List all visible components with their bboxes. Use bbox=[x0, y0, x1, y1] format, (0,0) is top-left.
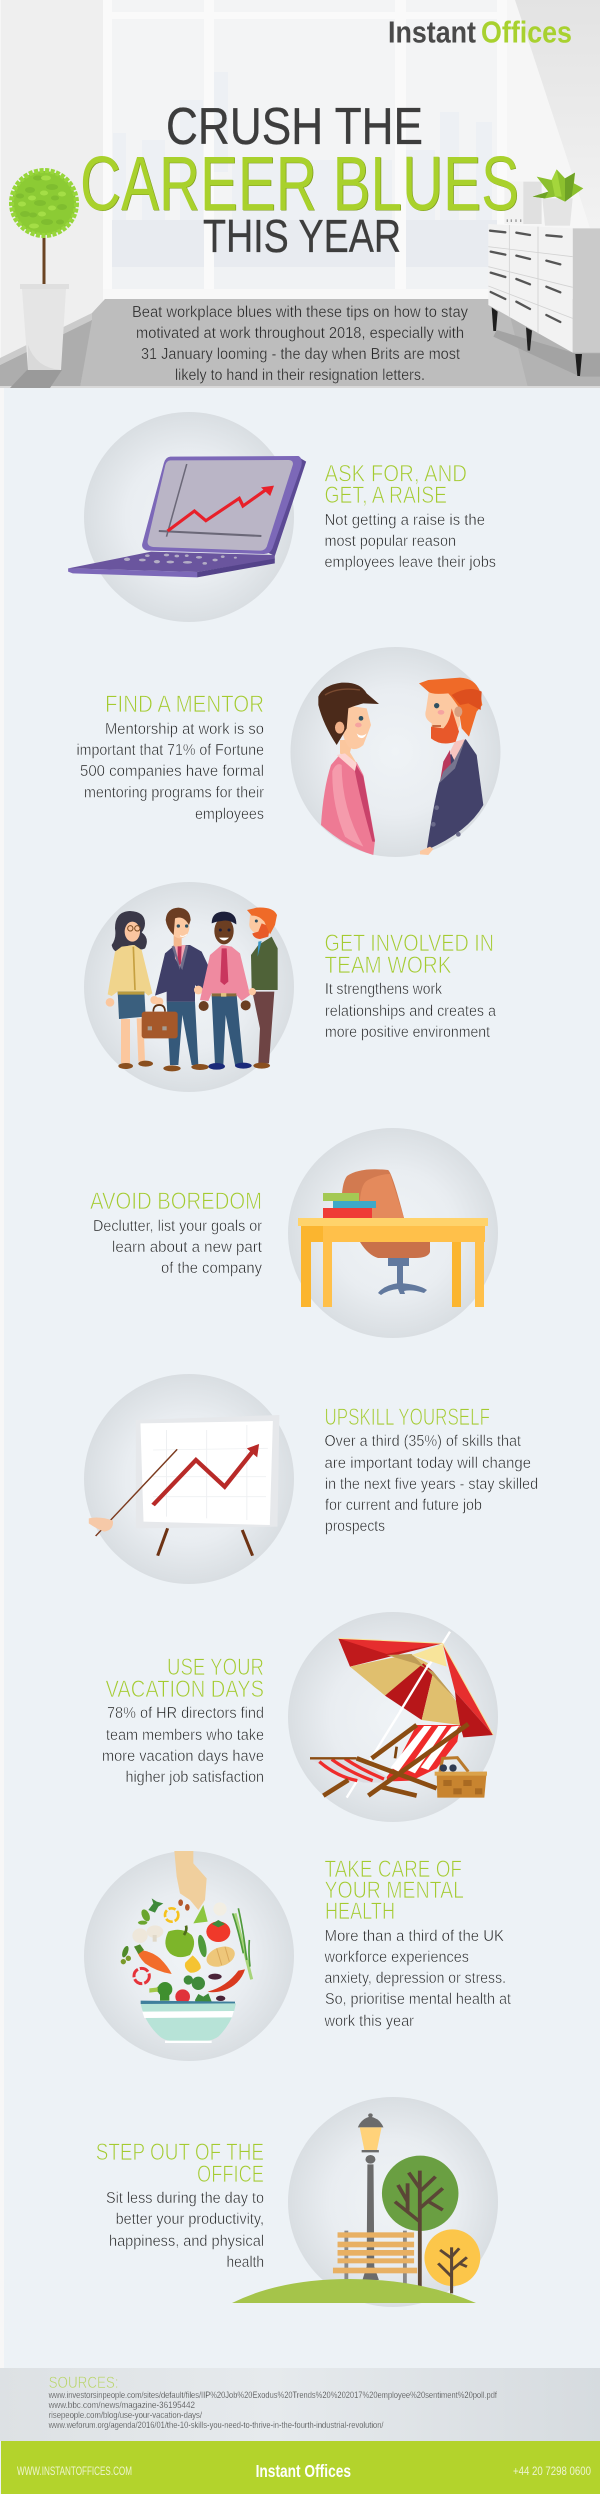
panel: get involved in team work bbox=[84, 882, 496, 1092]
body text: are important today will change bbox=[324, 1455, 531, 1472]
body text: in the next five years - stay skilled bbox=[325, 1476, 538, 1493]
panel: step out of the office bbox=[96, 2097, 498, 2307]
body text bbox=[324, 512, 496, 571]
body text: employees bbox=[195, 806, 264, 823]
body text: Not getting a raise is the bbox=[324, 512, 485, 529]
icon: park with lamp, bench and trees bbox=[232, 2113, 480, 2303]
books bbox=[323, 1193, 376, 1218]
body text: more vacation days have bbox=[102, 1748, 264, 1765]
body text: learn about a new part bbox=[112, 1239, 263, 1256]
icon: potted topiary tree bbox=[10, 170, 76, 388]
panel: take care of your mental health bbox=[84, 1851, 512, 2061]
body text: higher job satisfaction bbox=[126, 1769, 264, 1786]
umbrella bbox=[338, 1638, 493, 1737]
left man bbox=[318, 683, 379, 855]
title bbox=[80, 98, 520, 262]
body text bbox=[324, 1433, 538, 1535]
icon: presentation board with rising arrow bbox=[89, 1415, 279, 1556]
body text: work this year bbox=[324, 2013, 414, 2030]
circle backdrop bbox=[84, 412, 294, 622]
man in pink shirt bbox=[199, 912, 252, 1070]
sources band bbox=[0, 2368, 600, 2441]
potted plant on cabinet bbox=[533, 169, 583, 226]
sources list: www.investorsinpeople.com/sites/default/files/IIP%20Job%20Exodus%20Trends%20%202017%20employee%20sentiment%20poll.pdf bbox=[48, 2390, 497, 2401]
body text bbox=[102, 1705, 264, 1786]
big green tree bbox=[382, 2156, 458, 2288]
bench bbox=[333, 2231, 417, 2293]
heading: YOUR MENTAL bbox=[324, 1877, 464, 1904]
circle backdrop bbox=[290, 647, 500, 857]
body text: Sit less during the day to bbox=[106, 2190, 264, 2207]
panel: ask for a raise bbox=[68, 412, 496, 622]
body text: So, prioritise mental health at bbox=[325, 1991, 512, 2008]
heading: VACATION DAYS bbox=[106, 1676, 264, 1703]
body text: happiness, and physical bbox=[109, 2233, 264, 2250]
footer bar bbox=[1, 2441, 600, 2494]
grass hill bbox=[232, 2279, 476, 2303]
icon: laptop with rising chart bbox=[68, 456, 306, 577]
sources heading: SOURCES: bbox=[49, 2373, 119, 2392]
icon: team of four colleagues bbox=[106, 908, 278, 1071]
body text bbox=[106, 2190, 264, 2271]
deck chair bbox=[310, 1724, 468, 1796]
circle backdrop bbox=[288, 2097, 498, 2307]
body text: 78% of HR directors find bbox=[107, 1705, 264, 1722]
heading bbox=[324, 1856, 464, 1925]
body text: for current and future job bbox=[325, 1497, 482, 1514]
hero room background bbox=[0, 0, 600, 388]
footer logo: Instant Offices bbox=[256, 2461, 351, 2481]
title: THIS YEAR bbox=[203, 210, 401, 262]
heading: USE YOUR bbox=[167, 1654, 264, 1681]
sources list: risepeople.com/blog/use-your-vacation-days/ bbox=[49, 2410, 202, 2421]
heading: AVOID BOREDOM bbox=[90, 1188, 262, 1215]
small yellow tree bbox=[424, 2229, 480, 2293]
panel: upskill yourself bbox=[84, 1374, 538, 1584]
heading: TEAM WORK bbox=[324, 952, 452, 979]
heading bbox=[324, 930, 494, 979]
heading bbox=[96, 2139, 264, 2188]
heading: TAKE CARE OF bbox=[324, 1856, 462, 1883]
body text: Declutter, list your goals or bbox=[93, 1218, 262, 1235]
icon: mentor and mentee talking bbox=[318, 678, 483, 855]
body text: most popular reason bbox=[324, 533, 456, 550]
body text bbox=[325, 981, 496, 1041]
body text: Mentorship at work is so bbox=[105, 721, 264, 738]
sources list bbox=[48, 2390, 497, 2431]
right man bbox=[419, 678, 483, 855]
heading: FIND A MENTOR bbox=[105, 691, 264, 718]
body text: better your productivity, bbox=[116, 2211, 264, 2228]
office chair bbox=[342, 1169, 430, 1295]
man in green jacket bbox=[247, 908, 278, 1069]
heading bbox=[106, 1654, 264, 1703]
heading: STEP OUT OF THE bbox=[96, 2139, 264, 2166]
intro text: likely to hand in their resignation letters. bbox=[175, 367, 425, 384]
intro text: Beat workplace blues with these tips on how to stay bbox=[132, 304, 468, 321]
panel: use your vacation days bbox=[102, 1612, 498, 1822]
panel: avoid boredom bbox=[90, 1128, 498, 1338]
circle backdrop bbox=[288, 1128, 498, 1338]
sources list: www.weforum.org/agenda/2016/01/the-10-skills-you-need-to-thrive-in-the-fourth-industrial-revolution/ bbox=[48, 2420, 384, 2431]
desk bbox=[298, 1218, 488, 1307]
body text bbox=[93, 1218, 263, 1277]
icon: desk with chair and books bbox=[298, 1169, 488, 1307]
body text: anxiety, depression or stress. bbox=[324, 1970, 506, 1987]
body text: employees leave their jobs bbox=[324, 554, 496, 571]
body text: team members who take bbox=[106, 1727, 264, 1744]
body text: important that 71% of Fortune bbox=[76, 742, 264, 759]
panel: hero office scene bbox=[0, 0, 600, 388]
heading: ASK FOR, AND bbox=[324, 460, 467, 488]
body text: prospects bbox=[325, 1518, 385, 1535]
heading bbox=[324, 460, 467, 509]
body text bbox=[76, 721, 264, 823]
sources list: www.bbc.com/news/magazine-36195442 bbox=[48, 2400, 195, 2411]
logo: Instant Offices bbox=[388, 14, 572, 50]
body text bbox=[324, 1928, 512, 2030]
circle backdrop bbox=[288, 1612, 498, 1822]
body text: mentoring programs for their bbox=[84, 784, 264, 802]
circle backdrop bbox=[84, 1851, 294, 2061]
icon: filing cabinet with plant bbox=[488, 169, 600, 377]
heading: UPSKILL YOURSELF bbox=[324, 1404, 490, 1431]
circle backdrop bbox=[84, 1374, 294, 1584]
logo: Instant Offices: Offices bbox=[481, 14, 572, 50]
logo: Instant Offices: Instant bbox=[388, 14, 476, 50]
body text: More than a third of the UK bbox=[324, 1928, 505, 1945]
man in navy suit bbox=[155, 908, 210, 1071]
body text: Over a third (35%) of skills that bbox=[324, 1433, 522, 1450]
body text: It strengthens work bbox=[325, 981, 442, 998]
folders on cabinet bbox=[504, 182, 542, 224]
briefcase bbox=[142, 1005, 178, 1038]
heading: HEALTH bbox=[325, 1898, 395, 1925]
heading: GET INVOLVED IN bbox=[324, 930, 494, 957]
picnic basket bbox=[435, 1758, 487, 1798]
street lamp bbox=[358, 2113, 383, 2280]
icon: beach umbrella, deck chair and basket bbox=[310, 1632, 493, 1798]
body text: 500 companies have formal bbox=[80, 763, 264, 780]
intro text bbox=[132, 304, 468, 384]
icon: hand dropping vegetables into bowl bbox=[121, 1851, 252, 2043]
intro text: motivated at work throughout 2018, especially with bbox=[136, 325, 464, 342]
body text: workforce experiences bbox=[324, 1949, 469, 1966]
heading: GET, A RAISE bbox=[324, 482, 447, 509]
panel: footer bbox=[1, 2441, 600, 2494]
body text: relationships and creates a bbox=[325, 1003, 496, 1020]
body text: of the company bbox=[161, 1260, 262, 1277]
heading: OFFICE bbox=[197, 2161, 264, 2188]
circle backdrop bbox=[84, 882, 294, 1092]
body text: health bbox=[226, 2254, 264, 2271]
body text: more positive environment bbox=[325, 1024, 491, 1041]
panel: sources bbox=[0, 2368, 600, 2441]
woman bbox=[106, 911, 158, 1069]
intro text: 31 January looming - the day when Brits are most bbox=[141, 346, 461, 363]
title: CRUSH THE bbox=[166, 98, 423, 156]
website: WWW.INSTANTOFFICES.COM bbox=[17, 2464, 132, 2478]
panel: find a mentor bbox=[76, 647, 500, 857]
